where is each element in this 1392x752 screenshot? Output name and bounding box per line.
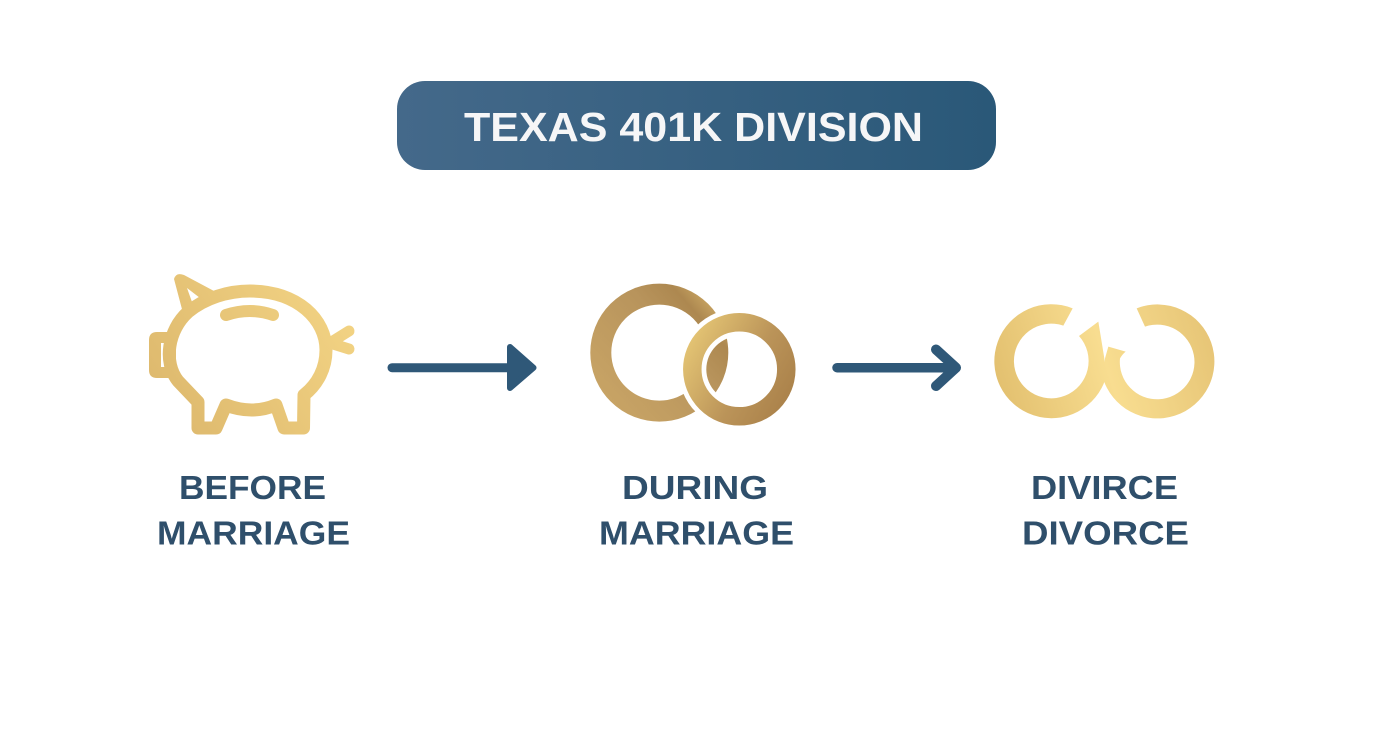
arrow: during to divorce bbox=[837, 350, 956, 386]
title banner bbox=[397, 81, 996, 170]
label: during marriage bbox=[599, 469, 794, 552]
arrow: before to during bbox=[392, 347, 534, 388]
title text: TEXAS 401K DIVISION bbox=[464, 104, 923, 150]
label: divorce: DIVIRCE bbox=[1031, 469, 1178, 506]
label: before marriage bbox=[157, 469, 350, 552]
icon: interlocked wedding rings bbox=[601, 294, 800, 430]
label: during marriage: MARRIAGE bbox=[599, 514, 794, 552]
icon: broken rings bbox=[994, 304, 1214, 418]
icon: piggy bank bbox=[149, 274, 349, 428]
label: divorce bbox=[1022, 469, 1189, 552]
label: during marriage: DURING bbox=[622, 469, 768, 506]
label: before marriage: MARRIAGE bbox=[157, 514, 350, 552]
label: before marriage: BEFORE bbox=[179, 469, 326, 506]
label: divorce: DIVORCE bbox=[1022, 514, 1189, 552]
